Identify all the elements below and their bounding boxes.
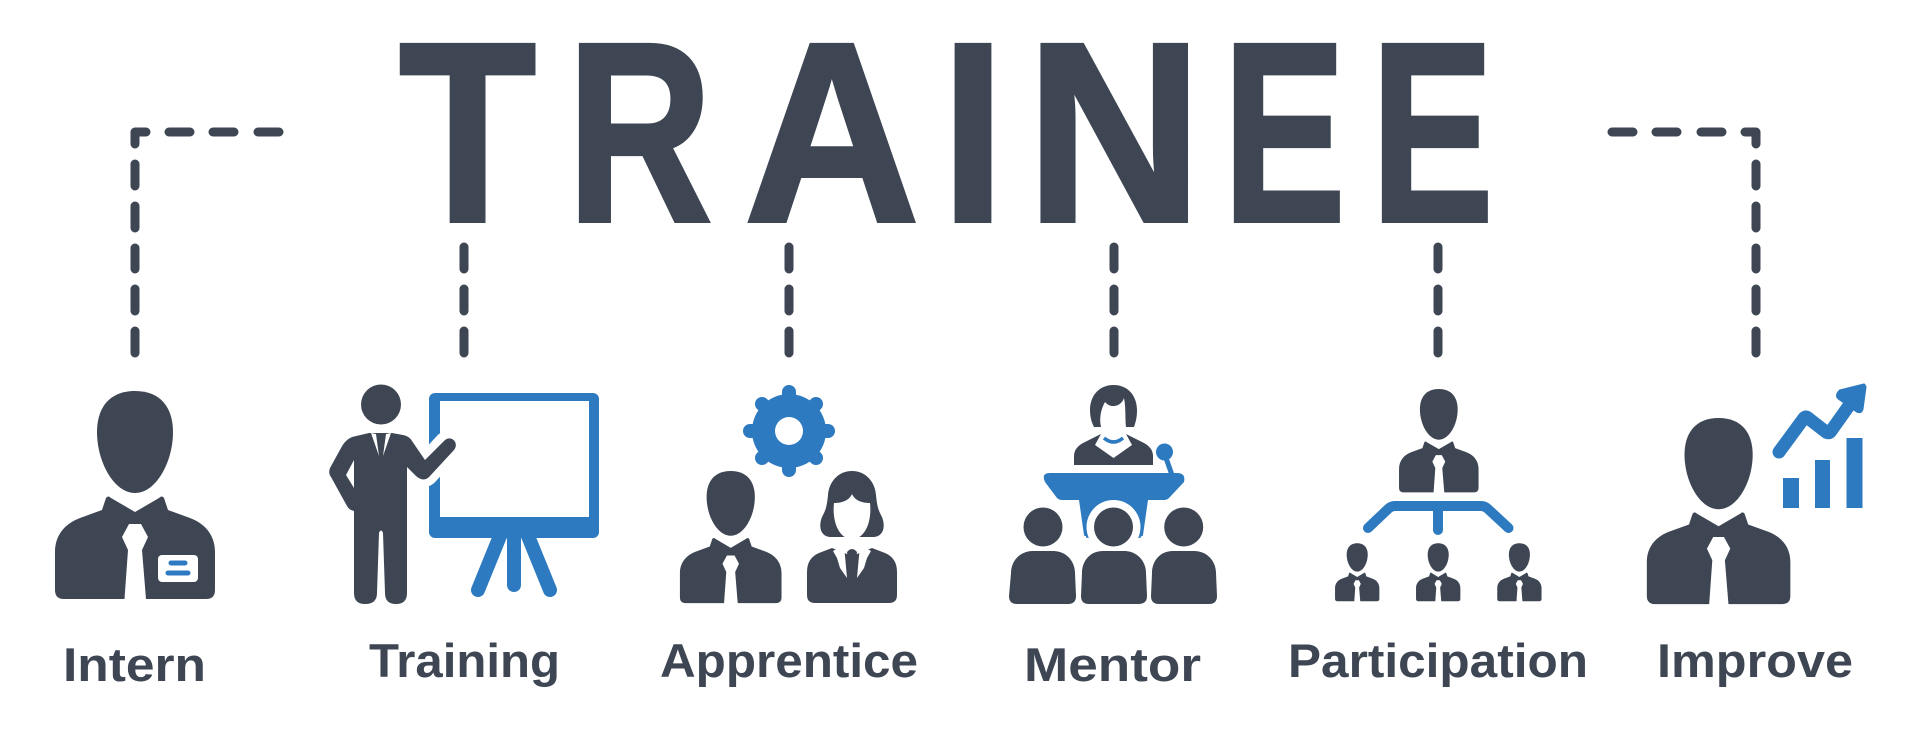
label: Apprentice: Apprentice	[660, 634, 918, 687]
icon: apprentice woman	[807, 471, 897, 603]
dashed connector: Participation	[1434, 247, 1442, 353]
icon: improve with rising chart	[1647, 385, 1865, 604]
dashed connector: Intern	[135, 132, 279, 353]
icon: participation hierarchy	[1335, 389, 1542, 601]
label: Mentor: Mentor	[1024, 638, 1201, 691]
label: Intern: Intern	[63, 638, 206, 691]
label: Training: Training	[369, 634, 560, 687]
label: Improve: Improve	[1657, 634, 1853, 687]
icon: apprentice gear	[750, 392, 828, 470]
label: Participation: Participation	[1288, 634, 1588, 687]
icon: trainer at presentation board	[329, 384, 599, 604]
icon: mentor at podium	[1009, 385, 1217, 604]
dashed connector: Training	[460, 247, 468, 353]
dashed connector: Apprentice	[784, 247, 794, 353]
title	[399, 0, 1494, 276]
icon: apprentice man	[680, 471, 782, 603]
icon: intern with name badge	[55, 391, 215, 599]
dashed connector: Improve	[1612, 132, 1756, 353]
dashed connector: Mentor	[1110, 247, 1118, 353]
